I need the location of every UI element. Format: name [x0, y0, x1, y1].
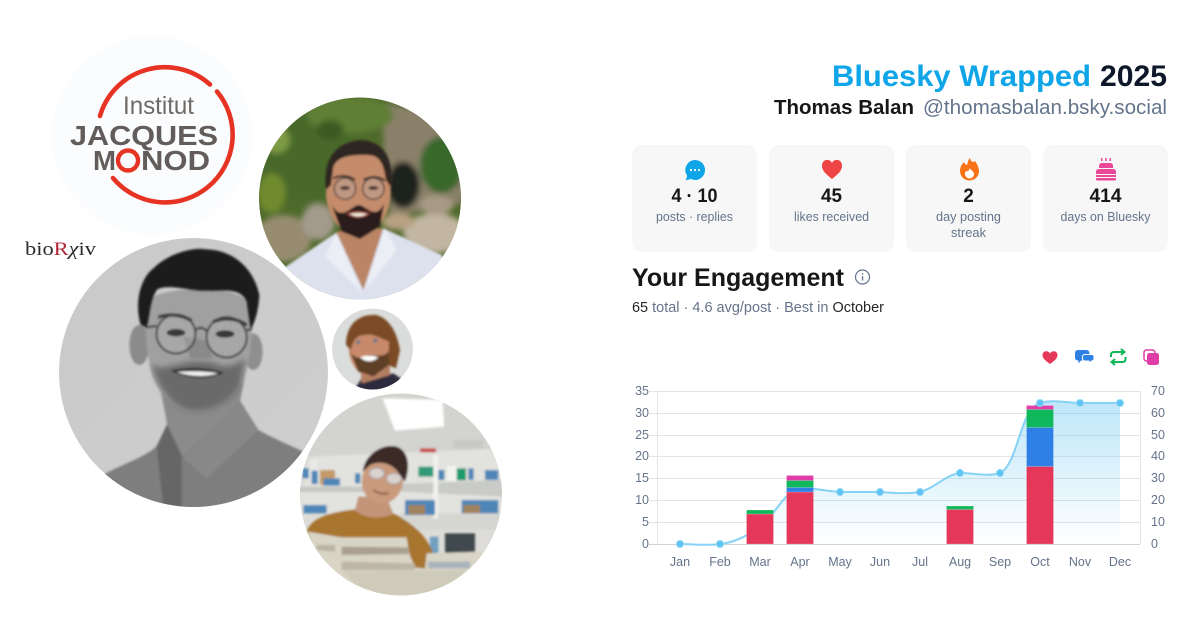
month labels: Jun — [870, 555, 890, 569]
photo: lab portrait — [297, 393, 507, 597]
right axis labels: 20 — [1151, 493, 1165, 507]
month labels — [670, 555, 1131, 569]
user name and handle — [774, 97, 1167, 119]
stacked bars — [746, 406, 1054, 544]
left axis labels: 5 — [642, 515, 649, 529]
left axis labels: 25 — [635, 428, 649, 442]
icon: chat bubble — [685, 160, 705, 180]
month labels: Nov — [1069, 555, 1092, 569]
stat card: days on Bluesky — [1043, 145, 1168, 252]
month labels: Jan — [670, 555, 690, 569]
right axis labels: 0 — [1151, 537, 1158, 551]
left axis labels: 35 — [635, 384, 649, 398]
logo: Institut Jacques Monod: JACQUES — [70, 120, 218, 151]
stat card: likes received: likes received — [794, 210, 869, 224]
stat card: posting streak: 2 — [963, 186, 974, 207]
month labels: Apr — [790, 555, 810, 569]
month labels: Feb — [709, 555, 731, 569]
line markers — [676, 400, 1124, 548]
icon: quotes legend — [1144, 350, 1159, 365]
heading: Your Engagement: Your Engagement — [632, 264, 845, 292]
icon: birthday cake — [1096, 158, 1116, 180]
logo: bioRxiv: bioRχiv — [25, 239, 97, 260]
photo: small smiling portrait — [332, 308, 413, 397]
stat card: likes received: 45 — [821, 186, 842, 207]
logo: Institut Jacques Monod — [52, 35, 252, 235]
engagement summary: 65 total · 4.6 avg/post · Best in October — [632, 300, 884, 316]
cumulative line — [680, 401, 1120, 545]
chart legend — [1042, 349, 1159, 365]
logo: Institut Jacques Monod: M — [93, 145, 116, 176]
left axis labels: 15 — [635, 471, 649, 485]
stat card: days on Bluesky: 414 — [1090, 186, 1122, 207]
logo: Institut Jacques Monod: NOD — [141, 145, 210, 176]
combo chart: monthly engagement bars and cumulative line — [635, 384, 1165, 569]
stat card: likes received — [769, 145, 894, 252]
icon: likes legend — [1042, 351, 1058, 364]
title: Bluesky Wrapped — [832, 60, 1091, 93]
left axis labels: 10 — [635, 493, 649, 507]
right axis labels: 50 — [1151, 428, 1165, 442]
right axis labels: 10 — [1151, 515, 1165, 529]
icon: flame — [960, 158, 979, 180]
right axis labels: 70 — [1151, 384, 1165, 398]
photo: portrait in gorge — [259, 98, 461, 300]
stat card: posting streak: streak — [951, 226, 987, 240]
icon: replies legend — [1075, 350, 1094, 364]
stat card: days on Bluesky: days on Bluesky — [1060, 210, 1151, 224]
right axis labels: 60 — [1151, 406, 1165, 420]
month labels: Oct — [1030, 555, 1050, 569]
stat card: posts and replies: 4 · 10 — [672, 186, 718, 207]
right axis labels: 30 — [1151, 471, 1165, 485]
month labels: Mar — [749, 555, 771, 569]
icon: heart — [822, 160, 842, 179]
stat card: posting streak — [906, 145, 1031, 252]
month labels: Dec — [1109, 555, 1131, 569]
month labels: Jul — [912, 555, 928, 569]
icon: info — [856, 270, 870, 284]
left axis labels: 0 — [642, 537, 649, 551]
cumulative area — [680, 401, 1120, 545]
stat card: posting streak: day posting — [936, 210, 1001, 224]
left axis labels: 20 — [635, 449, 649, 463]
stat card: posts and replies: posts · replies — [656, 210, 733, 224]
month labels: May — [828, 555, 853, 569]
month labels: Sep — [989, 555, 1011, 569]
title: 2025 — [1100, 60, 1167, 93]
right axis labels: 40 — [1151, 449, 1165, 463]
stat card: posts and replies — [632, 145, 757, 252]
left axis labels — [635, 384, 649, 551]
user name and handle: Thomas Balan — [774, 97, 914, 119]
right axis labels — [1151, 384, 1165, 551]
logo: Institut Jacques Monod: Institut — [123, 92, 194, 120]
month labels: Aug — [949, 555, 971, 569]
icon: reposts legend — [1111, 349, 1126, 365]
left axis labels: 30 — [635, 406, 649, 420]
user name and handle: @thomasbalan.bsky.social — [923, 97, 1167, 119]
photo: black and white portrait — [59, 238, 328, 530]
